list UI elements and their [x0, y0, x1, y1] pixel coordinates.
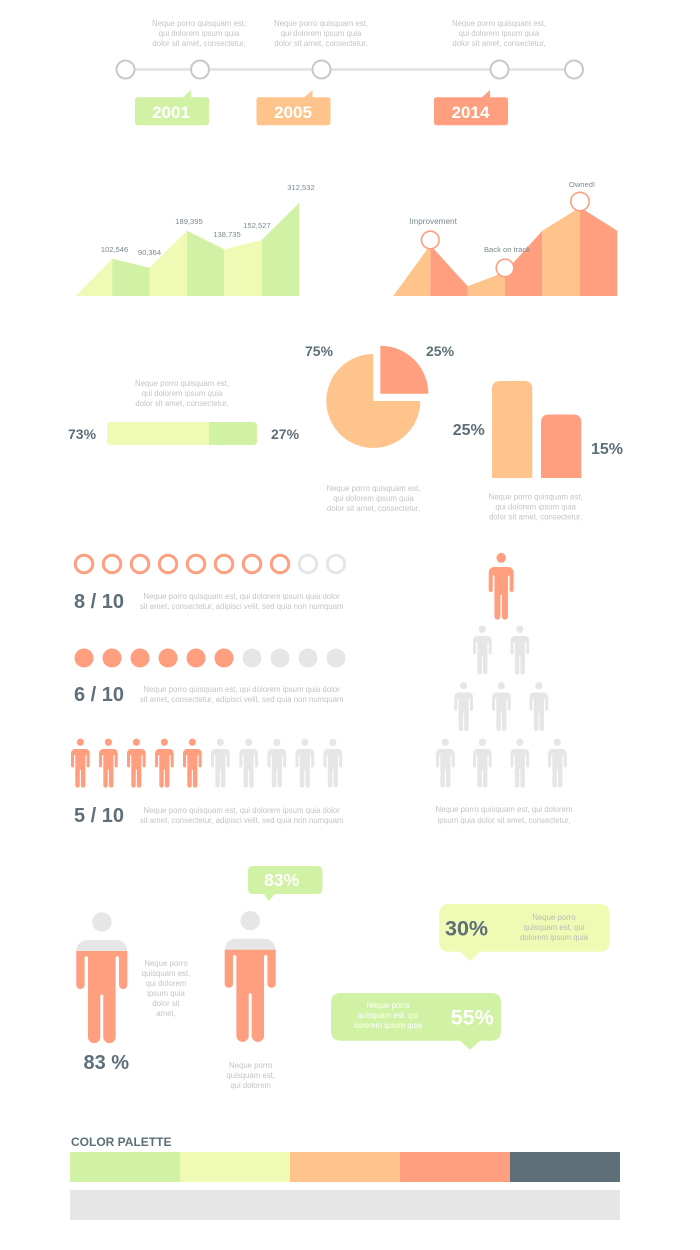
color palette: COLOR PALETTE	[71, 1135, 171, 1149]
orange area chart	[393, 180, 617, 296]
year tag 2001: 2001	[152, 103, 190, 122]
timeline captions: dolor sit amet, consectetur,	[152, 39, 246, 48]
rating 5 of 10 people: Neque porro quisquam est, qui dolorem ipsum quia dolor	[144, 806, 340, 815]
bar chart: qui dolorem ipsum quia	[495, 502, 577, 512]
rating 5 of 10 people: 5 / 10	[74, 805, 124, 827]
rating 8 of 10 rings: 8 / 10	[74, 591, 124, 613]
timeline captions: qui dolorem ipsum quia	[281, 29, 362, 38]
pie chart: qui dolorem ipsum quia	[333, 494, 414, 503]
year tag 2005: 2005	[274, 103, 312, 122]
rating 5 of 10 people	[71, 739, 344, 827]
large person 83 percent: ipsum quia	[147, 989, 186, 998]
callout 30 percent: 30%	[445, 917, 488, 941]
year tag 2005	[256, 90, 330, 125]
callout 55 percent	[331, 993, 501, 1050]
orange area chart: Owned!	[569, 180, 595, 189]
callout 30 percent: dolorem ipsum quia	[520, 933, 589, 942]
green area chart	[76, 183, 315, 296]
green area chart: 152,527	[243, 221, 271, 230]
rating 6 of 10 dots: sit amet, consectetur, adipisci velit, sed quia non numquam	[140, 695, 344, 704]
timeline captions: qui dolorem ipsum quia	[159, 29, 240, 38]
callout 55 percent: Neque porro	[366, 1001, 410, 1010]
bar chart: Neque porro quisquam est,	[489, 492, 583, 502]
callout 30 percent: Neque porro	[532, 913, 576, 922]
timeline	[116, 19, 583, 125]
bar chart: 25%	[453, 422, 485, 439]
timeline captions	[152, 19, 546, 48]
bar chart: 15%	[591, 441, 623, 458]
callout 30 percent: quisquam est, qui	[523, 923, 585, 932]
green area chart: 312,532	[287, 183, 315, 192]
year tag 2014: 2014	[452, 103, 490, 122]
green area chart: 90,364	[138, 248, 161, 257]
large person with 83 percent bubble: quisquam est,	[226, 1071, 275, 1080]
callout 55 percent: dolorem ipsum quia	[354, 1021, 423, 1030]
large person with 83 percent bubble: qui dolorem	[230, 1081, 271, 1090]
callout 55 percent: quisquam est, qui	[357, 1011, 419, 1020]
progress bar 73 / 27: dolor sit amet, consectetur,	[135, 399, 229, 408]
progress bar 73 / 27: qui dolorem ipsum quia	[142, 389, 223, 398]
green area chart: 138,735	[213, 230, 241, 239]
color palette	[70, 1135, 620, 1220]
rating 5 of 10 people: sit amet, consectetur, adipisci velit, sed quia non numquam	[140, 816, 344, 825]
bar chart	[453, 381, 623, 522]
orange area chart: Improvement	[409, 217, 458, 226]
rating 8 of 10 rings	[74, 555, 345, 613]
pie chart: 25%	[426, 343, 455, 359]
timeline line and nodes	[116, 60, 583, 78]
timeline captions: Neque porro quisquam est,	[152, 19, 246, 28]
rating 8 of 10 rings: sit amet, consectetur, adipisci velit, sed quia non numquam	[140, 602, 344, 611]
rating 8 of 10 rings: Neque porro quisquam est, qui dolorem ipsum quia dolor	[144, 592, 340, 601]
large person with 83 percent bubble: 83%	[264, 870, 300, 890]
orange area chart: Back on track	[484, 245, 530, 254]
large person 83 percent: amet,	[156, 1009, 176, 1018]
large person 83 percent: qui dolorem	[146, 979, 186, 988]
progress bar 73 / 27: 73%	[68, 426, 97, 442]
large person with 83 percent bubble	[225, 866, 322, 1090]
progress bar 73 / 27: Neque porro quisquam est,	[135, 379, 229, 388]
large person 83 percent	[76, 912, 190, 1074]
people pyramid	[436, 553, 572, 825]
timeline captions: Neque porro quisquam est,	[452, 19, 546, 28]
rating 6 of 10 dots: 6 / 10	[74, 684, 124, 706]
callout 55 percent: 55%	[451, 1006, 494, 1030]
green area chart: 189,395	[175, 217, 203, 226]
large person 83 percent: quisquam est,	[142, 969, 190, 978]
rating 6 of 10 dots	[74, 648, 346, 706]
pie chart: 75%	[305, 343, 334, 359]
callout 30 percent	[439, 904, 610, 961]
timeline captions: dolor sit amet, consectetur,	[274, 39, 368, 48]
people pyramid: ipsum quia dolor sit amet, consectetur,	[437, 816, 571, 825]
green area chart: 102,546	[101, 245, 128, 254]
pie chart: Neque porro quisquam est,	[326, 484, 421, 493]
pie chart	[305, 343, 455, 513]
rating 6 of 10 dots: Neque porro quisquam est, qui dolorem ipsum quia dolor	[144, 685, 340, 694]
bar chart: dolor sit amet, consectetur,	[489, 512, 582, 522]
people pyramid: Neque porro quisquam est, qui dolorem	[436, 805, 572, 814]
large person 83 percent: dolor sit	[152, 999, 180, 1008]
year tag 2001	[135, 90, 209, 125]
progress bar 73 / 27: 27%	[271, 426, 300, 442]
timeline captions: Neque porro quisquam est,	[274, 19, 368, 28]
timeline captions: dolor sit amet, consectetur,	[452, 39, 546, 48]
large person 83 percent: Neque porro	[144, 959, 188, 968]
large person 83 percent: 83 %	[84, 1052, 129, 1074]
year tag 2014	[434, 90, 508, 125]
progress bar 73 / 27	[68, 379, 300, 445]
large person with 83 percent bubble: Neque porro	[229, 1061, 273, 1070]
pie chart: dolor sit amet, consectetur,	[327, 504, 420, 513]
timeline captions: qui dolorem ipsum quia	[459, 29, 540, 38]
